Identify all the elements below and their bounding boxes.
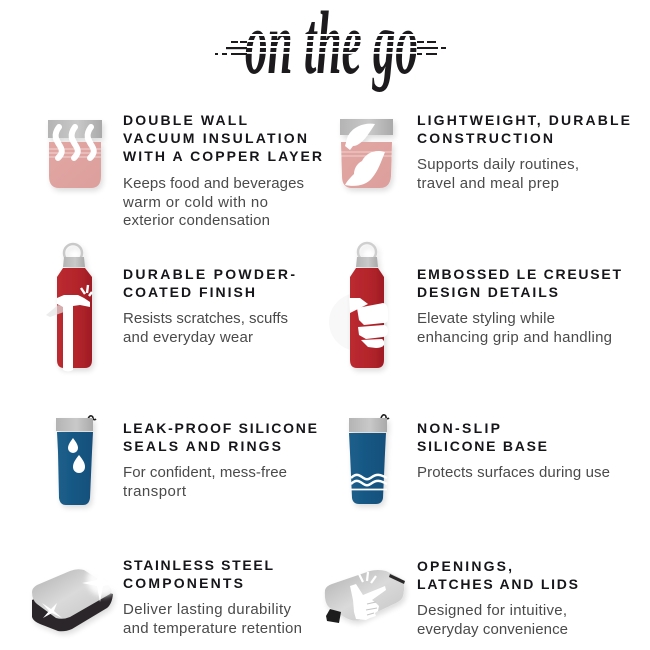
text block — [123, 601, 302, 637]
text block: Supports daily routines, — [417, 156, 579, 173]
icon: red bottle with hammer — [46, 244, 92, 372]
icon: blue tumbler with drops — [56, 416, 96, 505]
text block: exterior condensation — [123, 212, 270, 229]
panel: leak-proof seals — [56, 416, 317, 505]
text block: Designed for intuitive, — [417, 602, 567, 619]
panel: powder-coated finish — [46, 244, 295, 372]
heading: VACUUM INSULATION — [123, 130, 307, 146]
heading: EMBOSSED LE CREUSET — [417, 266, 621, 282]
text block: everyday convenience — [417, 621, 568, 638]
text block: For confident, mess-free — [123, 464, 287, 481]
text block — [123, 464, 287, 500]
heading: SEALS AND RINGS — [123, 438, 281, 454]
heading: STAINLESS STEEL — [123, 557, 273, 573]
heading — [417, 558, 578, 592]
heading: DESIGN DETAILS — [417, 284, 558, 300]
icon: jar with steam — [48, 120, 102, 188]
text block — [122, 175, 304, 229]
text block — [417, 310, 612, 346]
text block: Deliver lasting durability — [123, 601, 292, 618]
heading: COATED FINISH — [123, 284, 255, 300]
panel: embossed design — [329, 243, 621, 368]
panel: lightweight construction — [340, 112, 630, 192]
heading: SILICONE BASE — [417, 438, 547, 454]
icon: lid with pointing hand — [325, 570, 405, 623]
heading — [123, 557, 273, 591]
hand — [349, 298, 388, 348]
heading: LIGHTWEIGHT, DURABLE — [417, 112, 630, 128]
text block: Keeps food and beverages — [123, 175, 304, 192]
text block — [123, 310, 288, 346]
heading: COMPONENTS — [123, 575, 243, 591]
heading: LEAK-PROOF SILICONE — [123, 420, 317, 436]
heading: DOUBLE WALL — [123, 112, 247, 128]
text block — [417, 156, 579, 192]
panel: stainless steel — [32, 557, 302, 637]
text block: enhancing grip and handling — [417, 329, 612, 346]
text block — [417, 602, 568, 638]
text block: warm or cold with no — [122, 194, 268, 211]
heading — [417, 266, 621, 300]
panel: double wall insulation — [48, 112, 322, 229]
icon: lunch box with sparkles — [32, 563, 120, 631]
text block: Elevate styling while — [417, 310, 555, 327]
heading: NON-SLIP — [417, 420, 500, 436]
heading: DURABLE POWDER- — [123, 266, 295, 282]
heading — [123, 266, 295, 300]
heading — [123, 420, 317, 454]
heading — [417, 420, 547, 454]
icon: jar with feathers — [340, 119, 393, 188]
heading: LATCHES AND LIDS — [417, 576, 578, 592]
icon: red bottle with gripping hand — [329, 243, 388, 368]
text block: and temperature retention — [123, 620, 302, 637]
text block: Protects surfaces during use — [417, 464, 610, 481]
panel: non-slip base — [349, 415, 610, 504]
text block: and everyday wear — [123, 329, 253, 346]
heading: CONSTRUCTION — [417, 130, 553, 146]
heading: OPENINGS, — [417, 558, 512, 574]
heading — [417, 112, 630, 146]
text block: Resists scratches, scuffs — [123, 310, 288, 327]
text block: travel and meal prep — [417, 175, 559, 192]
panel: openings and latches — [325, 558, 578, 638]
heading — [123, 112, 322, 164]
text block: transport — [123, 483, 187, 500]
icon: blue tumbler with waves — [349, 415, 389, 504]
heading: WITH A COPPER LAYER — [123, 148, 322, 164]
